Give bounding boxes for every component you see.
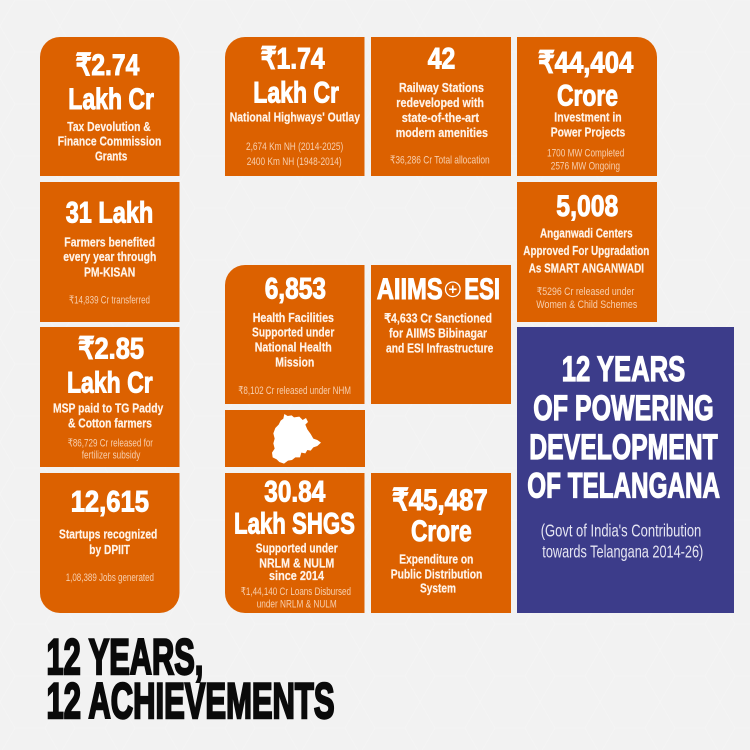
description: Approved For Upgradation bbox=[523, 244, 649, 258]
panel: MSP paid bbox=[40, 327, 180, 467]
headline: ₹1.74 Lakh Cr: Lakh Cr bbox=[253, 76, 339, 109]
note bbox=[68, 438, 153, 462]
headline: ₹44,404 Crore: ₹44,404 bbox=[538, 46, 634, 79]
description: by DPIIT bbox=[89, 543, 130, 557]
card background bbox=[371, 37, 511, 176]
card background bbox=[371, 473, 511, 613]
heading: 12 YEARS bbox=[562, 350, 685, 389]
headline: ₹44,404 Crore: Crore bbox=[557, 79, 618, 112]
note: ₹36,286 Cr Total allocation bbox=[390, 154, 490, 166]
headline: 30.84 Lakh SHGS: Lakh SHGS bbox=[234, 507, 355, 540]
icon: Telangana outline bbox=[272, 414, 321, 464]
description: Farmers benefited bbox=[64, 236, 155, 250]
headline: ₹2.74 Lakh Cr: ₹2.74 bbox=[76, 49, 140, 82]
description: and ESI Infrastructure bbox=[386, 341, 493, 355]
panel: national highways bbox=[225, 37, 364, 176]
description: Mission bbox=[275, 356, 314, 370]
description bbox=[252, 311, 334, 370]
footer title bbox=[46, 629, 334, 729]
card background bbox=[517, 327, 734, 613]
panel: self help groups bbox=[225, 473, 364, 613]
card background bbox=[40, 327, 180, 467]
note: 2400 Km NH (1948-2014) bbox=[247, 156, 342, 168]
headline: ₹1.74 Lakh Cr: ₹1.74 bbox=[261, 42, 325, 75]
headline: 12,615: 12,615 bbox=[71, 485, 149, 518]
panel: Telangana map bbox=[225, 410, 365, 467]
description: every year through bbox=[63, 250, 156, 264]
note bbox=[547, 148, 624, 172]
description: ₹4,633 Cr Sanctioned bbox=[384, 311, 492, 325]
headline: ₹2.85 Lakh Cr: ₹2.85 bbox=[78, 332, 144, 365]
card background bbox=[517, 182, 657, 322]
card background bbox=[225, 37, 364, 176]
headline: 42: 42 bbox=[428, 42, 455, 75]
description: Expenditure on bbox=[399, 553, 473, 567]
description: Investment in bbox=[554, 111, 622, 125]
note: fertilizer subsidy bbox=[82, 450, 141, 462]
note: ₹8,102 Cr released under NHM bbox=[238, 385, 351, 397]
card background bbox=[40, 473, 180, 613]
headline: 6,853: 6,853 bbox=[265, 272, 326, 305]
headline: ₹45,487 Crore bbox=[392, 484, 488, 548]
headline: AIIMS + ESI: AIIMS bbox=[377, 273, 443, 306]
note: 2576 MW Ongoing bbox=[551, 160, 620, 172]
card background bbox=[517, 37, 657, 176]
heading bbox=[527, 350, 720, 506]
description: Tax Devolution & bbox=[67, 120, 151, 134]
note: 2,674 Km NH (2014-2025) bbox=[246, 141, 343, 153]
description bbox=[551, 111, 625, 140]
headline: 30.84 Lakh SHGS: 30.84 bbox=[264, 476, 326, 509]
description: Health Facilities bbox=[253, 311, 334, 325]
note: ₹1,44,140 Cr Loans Disbursed bbox=[241, 586, 351, 598]
footer title: 12 YEARS, bbox=[46, 629, 203, 685]
description: As SMART ANGANWADI bbox=[529, 261, 644, 275]
description: Supported under bbox=[256, 541, 338, 555]
description: redeveloped with bbox=[396, 96, 484, 110]
description: Supported under bbox=[252, 326, 334, 340]
caption bbox=[541, 521, 703, 562]
description: for AIIMS Bibinagar bbox=[389, 326, 487, 340]
panel: AIIMS and ESI bbox=[371, 265, 511, 404]
description bbox=[59, 527, 157, 557]
description bbox=[58, 120, 161, 164]
description bbox=[391, 553, 482, 596]
headline: AIIMS + ESI: ESI bbox=[464, 273, 500, 306]
headline: ₹45,487 Crore: Crore bbox=[411, 515, 472, 548]
note: ₹86,729 Cr released for bbox=[68, 438, 153, 450]
card background bbox=[225, 410, 365, 467]
panel: railway stations bbox=[371, 37, 511, 176]
panel: power projects bbox=[517, 37, 657, 176]
description: state-of-the-art bbox=[402, 111, 480, 125]
description: MSP paid to TG Paddy bbox=[53, 401, 163, 415]
note: 1700 MW Completed bbox=[547, 148, 624, 160]
description bbox=[523, 226, 649, 275]
note bbox=[241, 586, 351, 611]
description: modern amenities bbox=[396, 126, 488, 140]
headline: ₹45,487 Crore: ₹45,487 bbox=[392, 484, 488, 517]
note: ₹5296 Cr released under bbox=[537, 286, 635, 298]
panel: anganwadi centers bbox=[517, 182, 657, 322]
headline: ₹2.74 Lakh Cr bbox=[68, 49, 154, 116]
description: PM-KISAN bbox=[84, 265, 135, 279]
panel: health facilities bbox=[225, 265, 364, 404]
panel: PM-KISAN farmers bbox=[40, 182, 180, 322]
panel: public distribution bbox=[371, 473, 511, 613]
panel: main title block bbox=[517, 327, 734, 613]
description: National Highways' Outlay bbox=[230, 110, 360, 124]
headline: ₹2.85 Lakh Cr: Lakh Cr bbox=[67, 366, 153, 399]
headline: ₹2.74 Lakh Cr: Lakh Cr bbox=[68, 83, 154, 116]
description: since 2014 bbox=[269, 569, 324, 583]
footer title: 12 ACHIEVEMENTS bbox=[46, 673, 334, 729]
description bbox=[256, 541, 338, 583]
panel: startups bbox=[40, 473, 180, 613]
card background bbox=[40, 182, 180, 322]
description: Public Distribution bbox=[391, 568, 482, 582]
note: under NRLM & NULM bbox=[257, 599, 337, 611]
card background bbox=[225, 265, 364, 404]
description bbox=[384, 311, 493, 355]
headline: ₹2.85 Lakh Cr bbox=[67, 332, 153, 399]
card background bbox=[371, 265, 511, 404]
card background bbox=[225, 473, 364, 613]
description: Grants bbox=[95, 150, 127, 164]
card background bbox=[40, 37, 180, 176]
headline: 31 Lakh: 31 Lakh bbox=[66, 197, 153, 230]
description bbox=[53, 401, 163, 430]
description: System bbox=[420, 582, 456, 596]
headline: ₹1.74 Lakh Cr bbox=[253, 42, 339, 109]
headline: 30.84 Lakh SHGS bbox=[234, 476, 355, 540]
description bbox=[396, 81, 488, 140]
description: National Health bbox=[255, 341, 332, 355]
headline: 5,008: 5,008 bbox=[556, 190, 618, 223]
description: Anganwadi Centers bbox=[540, 226, 633, 240]
description: Startups recognized bbox=[59, 527, 157, 541]
headline: ₹44,404 Crore bbox=[538, 46, 634, 112]
icon: circled plus bbox=[446, 282, 460, 297]
description: Railway Stations bbox=[399, 81, 484, 95]
description: & Cotton farmers bbox=[68, 416, 152, 430]
description: NRLM & NULM bbox=[259, 556, 334, 570]
description: Finance Commission bbox=[58, 135, 161, 149]
description bbox=[63, 236, 156, 279]
note: 1,08,389 Jobs generated bbox=[66, 572, 154, 584]
note: ₹14,839 Cr transferred bbox=[69, 295, 150, 307]
note bbox=[536, 286, 638, 311]
headline: AIIMS + ESI bbox=[377, 273, 500, 306]
description: Power Projects bbox=[551, 126, 625, 140]
note: Women & Child Schemes bbox=[536, 299, 638, 311]
note bbox=[246, 141, 343, 168]
panel: tax devolution bbox=[40, 37, 180, 176]
